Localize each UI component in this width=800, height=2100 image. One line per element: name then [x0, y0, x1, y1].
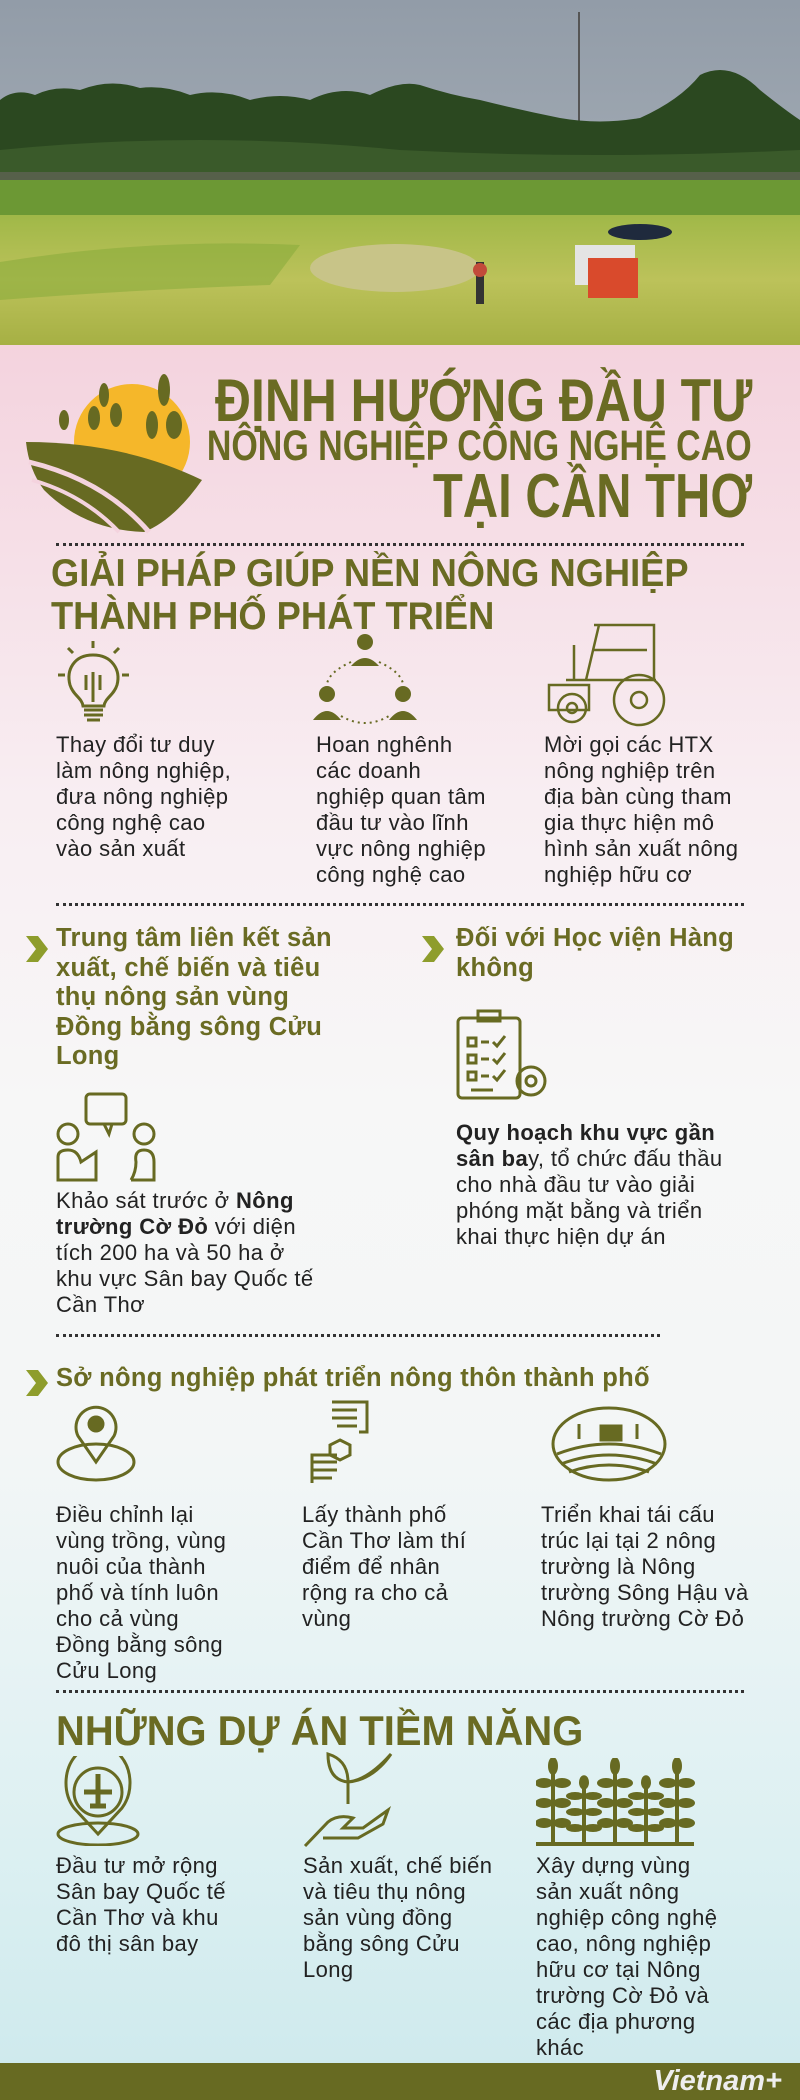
text: triển khai: Triển khai tái cấu [541, 1502, 715, 1527]
text: mời gọi: Mời gọi các HTX [544, 732, 714, 757]
text: đầu tư mở rộng: đô thị sân bay [56, 1931, 199, 1956]
heading: giải pháp: GIẢI PHÁP GIÚP NỀN NÔNG NGHIỆP [51, 552, 689, 595]
text: xây dựng vùng [536, 1853, 717, 2060]
text: lấy thành phố: Lấy thành phố [302, 1502, 447, 1527]
text: xây dựng vùng: khác [536, 2035, 584, 2060]
logo: farm sun and field [26, 374, 202, 534]
text: hoan nghênh: đầu tư vào lĩnh [316, 810, 469, 835]
chevron [26, 936, 48, 962]
photo header: rice field [0, 0, 800, 345]
icon: location pin [56, 1406, 136, 1482]
heading: Đối với Học viện Hàng [456, 924, 734, 952]
text: phóng mặt bằng và triển [456, 1198, 702, 1223]
logo text: Vietnam+ [653, 2065, 782, 2097]
text: triển khai: trường là Nông [541, 1554, 696, 1579]
title: NÔNG NGHIỆP CÔNG NGHỆ CAO [207, 422, 752, 470]
text: thay đổi: Thay đổi tư duy [56, 732, 215, 757]
text: Khảo sát trước ở Nông [56, 1188, 294, 1213]
icon: airport pin [56, 1756, 140, 1846]
text: tích 200 ha và 50 ha ở [56, 1240, 285, 1265]
text: thay đổi: công nghệ cao [56, 810, 206, 835]
text: hoan nghênh: nghiệp quan tâm [316, 784, 486, 809]
heading: xuất, chế biến và tiêu [56, 954, 321, 982]
icon: farm landscape [552, 1406, 666, 1482]
heading: giải pháp [51, 551, 689, 638]
text: điều chỉnh: Điều chỉnh lại [56, 1502, 194, 1527]
text: lấy thành phố [302, 1502, 466, 1631]
chevron [422, 936, 444, 962]
text: đầu tư mở rộng [56, 1853, 226, 1956]
heading: những dự án tiềm năng: NHỮNG DỰ ÁN TIỀM NĂNG [56, 1707, 583, 1754]
text: sản xuất chế biến: bằng sông Cửu [303, 1931, 460, 1956]
text: sản xuất chế biến [303, 1853, 492, 1982]
text: xây dựng vùng: Xây dựng vùng [536, 1853, 690, 1878]
panel: sở nông nghiệp [26, 1364, 749, 1683]
text: mời gọi: địa bàn cùng tham [544, 784, 732, 809]
text: triển khai: trúc lại tại 2 nông [541, 1528, 716, 1553]
text: triển khai [541, 1502, 749, 1631]
text: lấy thành phố: vùng [302, 1606, 351, 1631]
text: thay đổi: đưa nông nghiệp [56, 784, 228, 809]
text: trường Cờ Đỏ với diện [56, 1214, 296, 1239]
text: điều chỉnh: phố và tính luôn [56, 1580, 219, 1605]
text: điều chỉnh: cho cả vùng [56, 1606, 179, 1631]
text: đầu tư mở rộng: Sân bay Quốc tế [56, 1879, 226, 1904]
icon: clipboard gear [456, 1010, 546, 1100]
text: khai thực hiện dự án [456, 1224, 666, 1249]
heading: không [456, 954, 534, 982]
text: thay đổi: làm nông nghiệp, [56, 758, 231, 783]
text: sản xuất chế biến: sản vùng đồng [303, 1905, 453, 1930]
text: triển khai: trường Sông Hậu và [541, 1580, 749, 1605]
text: hoan nghênh: các doanh [316, 758, 421, 783]
text: lấy thành phố: điểm để nhân [302, 1554, 440, 1579]
text: sản xuất chế biến: Long [303, 1957, 354, 1982]
text: sản xuất chế biến: Sản xuất, chế biến [303, 1853, 492, 1878]
text: đầu tư mở rộng: Cần Thơ và khu [56, 1905, 219, 1930]
text: điều chỉnh: nuôi của thành [56, 1554, 206, 1579]
icon: discussion [56, 1092, 156, 1182]
text: cho nhà đầu tư vào giải [456, 1172, 695, 1197]
footer bar [0, 2063, 800, 2100]
text: mời gọi: hình sản xuất nông [544, 836, 738, 861]
text: Cần Thơ [56, 1292, 145, 1317]
text: hoan nghênh: vực nông nghiệp [316, 836, 486, 861]
title: TẠI CẦN THƠ [433, 462, 752, 531]
text: thay đổi: vào sản xuất [56, 836, 186, 861]
icon: lightbulb [58, 641, 129, 722]
text: thay đổi [56, 732, 231, 861]
text: điều chỉnh: vùng trồng, vùng [56, 1528, 226, 1553]
text: xây dựng vùng: các địa phương [536, 2009, 696, 2034]
text: xây dựng vùng: hữu cơ tại Nông [536, 1957, 701, 1982]
text: lấy thành phố: Cần Thơ làm thí [302, 1528, 466, 1553]
text: sân bay, tổ chức đấu thầu [456, 1146, 722, 1171]
panel: trung tâm liên kết [26, 924, 332, 1317]
text: sản xuất chế biến: và tiêu thụ nông [303, 1879, 466, 1904]
panel: học viện hàng không [422, 924, 734, 1249]
text: mời gọi [544, 732, 738, 887]
text: triển khai: Nông trường Cờ Đỏ [541, 1606, 744, 1631]
chevron [26, 1370, 48, 1396]
text: hoan nghênh: Hoan nghênh [316, 732, 453, 757]
text: đầu tư mở rộng: Đầu tư mở rộng [56, 1853, 218, 1878]
heading [56, 924, 332, 1070]
text: Quy hoạch khu vực gần [456, 1120, 715, 1145]
title: ĐỊNH HƯỚNG ĐẦU TƯ [215, 367, 752, 434]
text: lấy thành phố: rộng ra cho cả [302, 1580, 448, 1605]
text: mời gọi: gia thực hiện mô [544, 810, 714, 835]
icon: crop plants [536, 1758, 695, 1846]
heading: thụ nông sản vùng [56, 983, 289, 1011]
text: xây dựng vùng: trường Cờ Đỏ và [536, 1983, 709, 2008]
heading: giải pháp: THÀNH PHỐ PHÁT TRIỂN [51, 595, 494, 638]
heading: Long [56, 1042, 120, 1070]
text: hoan nghênh: công nghệ cao [316, 862, 466, 887]
text: hoan nghênh [316, 732, 486, 887]
text: xây dựng vùng: nghiệp công nghệ [536, 1905, 717, 1930]
text [56, 1188, 314, 1317]
title [207, 367, 752, 531]
text: điều chỉnh [56, 1502, 226, 1683]
text: khu vực Sân bay Quốc tế [56, 1266, 314, 1291]
heading: Sở nông nghiệp phát triển nông thôn thành phố [56, 1364, 650, 1392]
icon: network of people [313, 634, 417, 724]
icon: tractor [548, 624, 666, 726]
heading: Trung tâm liên kết sản [56, 924, 332, 952]
text: mời gọi: nghiệp hữu cơ [544, 862, 692, 887]
icon: hands exchange [310, 1400, 368, 1483]
text: xây dựng vùng: cao, nông nghiệp [536, 1931, 711, 1956]
text [456, 1120, 722, 1249]
text: xây dựng vùng: sản xuất nông [536, 1879, 679, 1904]
text: điều chỉnh: Đồng bằng sông [56, 1632, 223, 1657]
text: điều chỉnh: Cửu Long [56, 1658, 157, 1683]
heading: Đồng bằng sông Cửu [56, 1012, 322, 1040]
heading [456, 924, 734, 982]
text: mời gọi: nông nghiệp trên [544, 758, 716, 783]
icon: hand with sprout [304, 1752, 392, 1847]
